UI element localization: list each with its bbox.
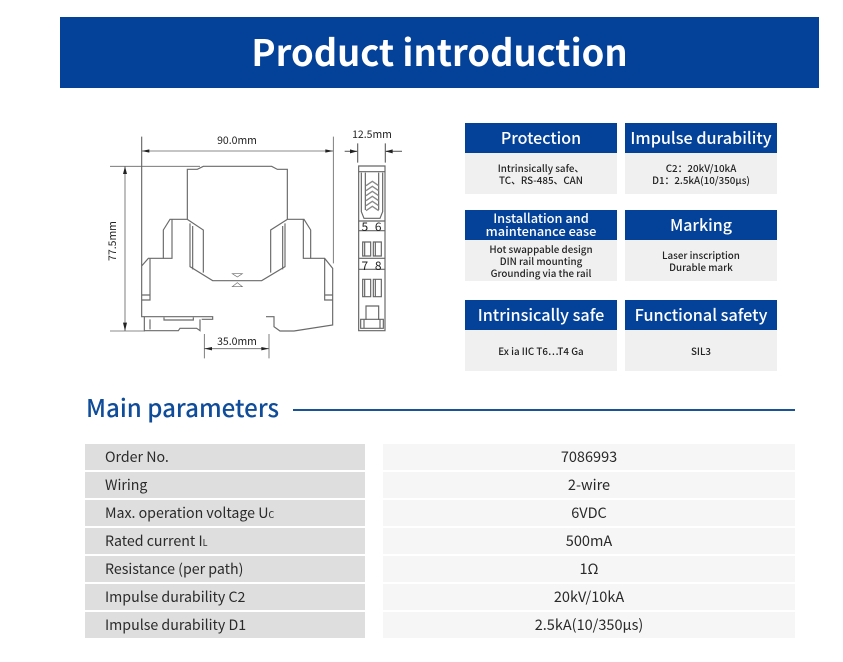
panel: impulse durability [625, 123, 777, 194]
heading rule [293, 409, 795, 411]
heading: functional safety [625, 300, 777, 330]
row value: impulse c2 [383, 584, 795, 610]
heading: installation and maintenance ease: Installation and [493, 208, 589, 227]
row value: impulse c2: 20kV/10kA [554, 586, 624, 607]
heading: marking [625, 210, 777, 240]
heading: protection: Protection [501, 125, 581, 149]
row label: resistance [85, 556, 365, 582]
heading: installation and maintenance ease: maintenance ease [486, 220, 596, 240]
row label: voltage: Max. operation voltage UC [105, 503, 274, 523]
text: impulse durability details: D1：2.5kA(10/350μs) [652, 172, 750, 186]
row label: wiring: Wiring [105, 475, 147, 495]
label: 35.0mm: 35.0mm [217, 334, 257, 349]
panel: functional safety [625, 300, 777, 371]
row label: voltage [85, 500, 365, 526]
text: installation details: Hot swappable design [489, 242, 593, 256]
text: marking details: Durable mark [669, 260, 733, 274]
terminal numbers 5 6: 5 6 [361, 218, 384, 235]
row value: impulse d1 [383, 612, 795, 638]
row value: wiring: 2-wire [568, 474, 610, 495]
text: installation details: DIN rail mounting [500, 254, 582, 268]
row label: impulse c2 [85, 584, 365, 610]
row value: impulse d1: 2.5kA(10/350μs) [535, 614, 643, 635]
text: impulse durability details: C2：20kV/10kA [666, 160, 736, 174]
row label: wiring [85, 472, 365, 498]
row label: rated current: Rated current IL [105, 531, 208, 551]
row label: impulse d1: Impulse durability D1 [105, 615, 246, 635]
row value: voltage: 6VDC [571, 502, 607, 523]
heading: intrinsically safe [465, 300, 617, 330]
row value: voltage [383, 500, 795, 526]
row label: impulse c2: Impulse durability C2 [105, 587, 245, 607]
dimension lines [110, 137, 333, 358]
panel: marking [625, 210, 777, 281]
heading: functional safety: Functional safety [635, 302, 767, 326]
text: functional safety details [625, 330, 777, 371]
heading: installation and maintenance ease [465, 210, 617, 240]
row value: order no [383, 444, 795, 470]
label: 12.5mm: 12.5mm [352, 127, 392, 142]
row label: order no: Order No. [105, 447, 169, 467]
text: impulse durability details [625, 153, 777, 194]
title banner [60, 17, 819, 88]
text: intrinsically safe details: Ex ia IIC T6…T4 Ga [498, 344, 584, 358]
row value: resistance [383, 556, 795, 582]
text: marking details: Laser inscription [662, 248, 740, 262]
terminal numbers 7 8: 7 8 [361, 257, 384, 274]
row value: rated current [383, 528, 795, 554]
front dimension drawing [110, 136, 334, 358]
text: installation details [465, 240, 617, 281]
row label: order no [85, 444, 365, 470]
text: functional safety details: SIL3 [691, 344, 711, 358]
panel: intrinsically safe [465, 300, 617, 371]
panel: installation and maintenance ease [465, 208, 617, 281]
text: intrinsically safe details [465, 330, 617, 371]
row label: resistance: Resistance (per path) [105, 559, 243, 579]
text: protection details [465, 153, 617, 194]
row value: resistance: 1Ω [579, 558, 599, 579]
text: protection details: TC、RS-485、CAN [499, 172, 583, 186]
title banner: Product introduction [251, 25, 628, 77]
row value: wiring [383, 472, 795, 498]
text: marking details [625, 240, 777, 281]
side dimension drawing [344, 143, 402, 332]
heading: intrinsically safe: Intrinsically safe [478, 302, 604, 326]
heading: impulse durability: Impulse durability [630, 125, 772, 149]
row label: rated current [85, 528, 365, 554]
text: installation details: Grounding via the rail [491, 266, 591, 280]
label: 90.0mm: 90.0mm [217, 133, 257, 148]
text: protection details: Intrinsically safe、 [498, 160, 584, 174]
row value: order no: 7086993 [561, 446, 617, 467]
heading: main parameters: Main parameters [86, 389, 279, 424]
heading: protection [465, 123, 617, 153]
heading: marking: Marking [670, 212, 732, 236]
row label: impulse d1 [85, 612, 365, 638]
panel: protection [465, 123, 617, 194]
label: 77.5mm: 77.5mm [105, 221, 120, 261]
row value: rated current: 500mA [566, 530, 612, 551]
